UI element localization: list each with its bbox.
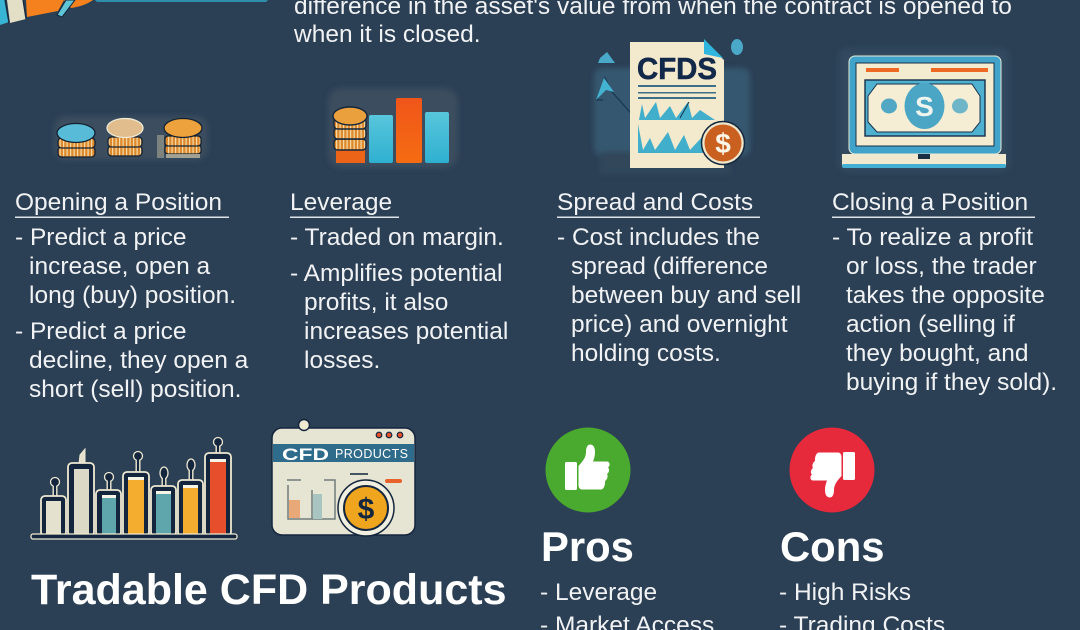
text block: pros list: - Leverage [540,579,657,606]
text block: leverage: - Amplifies potential [290,260,502,287]
icon: thumbs down [790,428,874,512]
icon: CFD products window: $ [358,493,375,526]
text block: leverage [290,224,508,374]
text block: spread and costs: holding costs. [571,340,721,367]
icon: coin stacks [54,116,208,160]
panel: cons [779,428,945,630]
icon: laptop with banknote [838,48,1010,172]
text block: opening a position: - Predict a price [15,224,187,251]
text block: closing a position: buying if they sold). [846,369,1057,396]
text block: spread and costs [557,224,801,367]
text block: opening a position: - Predict a price [15,318,187,345]
intro paragraph: when it is closed. [293,21,481,48]
heading: pros: Pros [541,523,634,570]
text block: spread and costs: - Cost includes the [557,224,760,251]
text block: leverage: losses. [304,347,380,374]
icon: CFDS document: $ [715,128,731,159]
intro paragraph [293,0,1012,48]
text block: opening a position: short (sell) position. [29,376,241,403]
icon: CFD products window: CFD [282,445,329,464]
icon: CFD products window [272,420,415,536]
text block: cons list: - High Risks [779,579,911,606]
heading: closing a position: Closing a Position [832,189,1028,216]
text block: leverage: increases potential [304,318,508,345]
text block: cons list [779,579,945,630]
text block: leverage: profits, it also [304,289,448,316]
panel: leverage [290,189,508,374]
text block: spread and costs: price) and overnight [571,311,788,338]
text block: leverage: - Traded on margin. [290,224,504,251]
icon: thumbs up [546,428,630,512]
text block: closing a position [832,224,1057,396]
heading: tradable CFD products: Tradable CFD Products [31,566,506,614]
heading: spread and costs: Spread and Costs [557,189,753,216]
text block: closing a position: they bought, and [846,340,1029,367]
icon: cropped rocket illustration top-left [0,0,268,25]
icon: leverage bars with coins [328,88,458,168]
icon: laptop with banknote: S [915,91,934,122]
heading: cons: Cons [780,523,884,570]
text block: closing a position: - To realize a profit [832,224,1033,251]
icon: CFDS document [594,39,750,174]
text block: opening a position: increase, open a [29,253,211,280]
text block: closing a position: action (selling if [846,311,1015,338]
text block: opening a position: long (buy) position. [29,282,236,309]
panel: opening a position [15,189,249,403]
panel: closing a position [832,189,1057,396]
text block: opening a position [15,224,249,403]
icon: CFD products window: PRODUCTS [335,447,408,461]
panel: pros [540,428,714,630]
text block: closing a position: takes the opposite [846,282,1045,309]
text block: spread and costs: spread (difference [571,253,768,280]
text block: closing a position: or loss, the trader [846,253,1037,280]
panel: spread and costs [557,189,801,367]
heading: opening a position: Opening a Position [15,189,222,216]
text block: spread and costs: between buy and sell [571,282,801,309]
icon: candlestick bar chart [31,438,237,539]
text block: pros list [540,579,714,630]
icon: CFDS document: CFDS [637,52,717,86]
text block: opening a position: decline, they open a [29,347,249,374]
heading: leverage: Leverage [290,189,392,216]
